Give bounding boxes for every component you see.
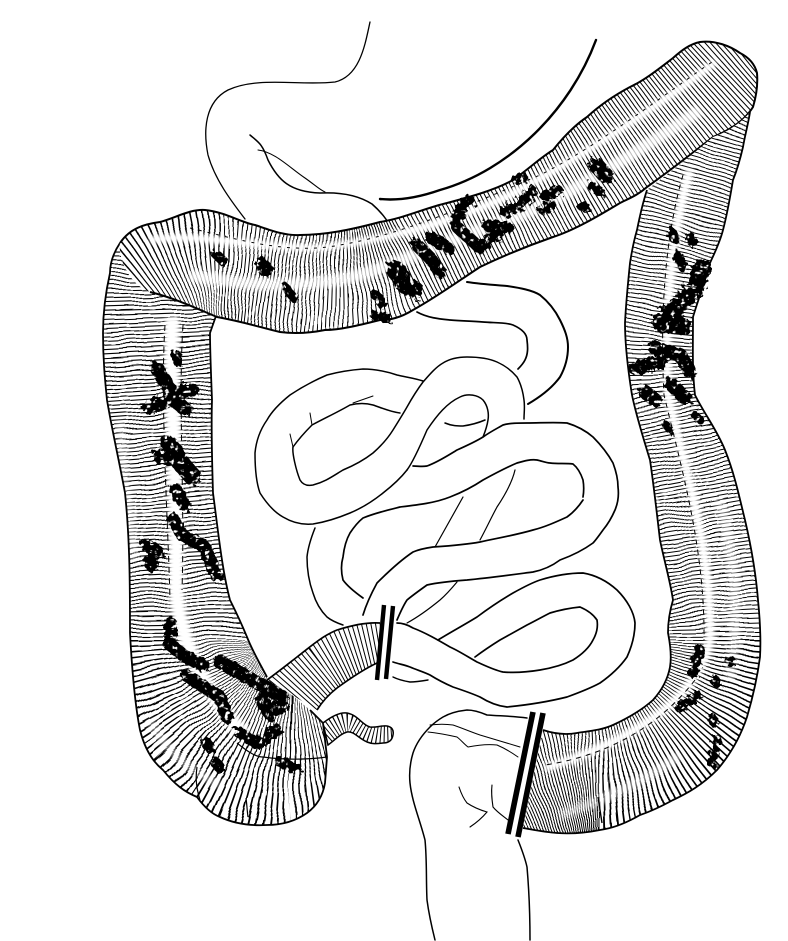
transverse colon: [119, 40, 758, 334]
rectum and sigmoid outline: [410, 710, 530, 940]
sigmoid fold: [598, 797, 602, 823]
ascending colon highlight band: [172, 318, 245, 735]
lesions: hepatic end and cecum: [170, 623, 296, 768]
cecum folds: [196, 743, 327, 817]
descending colon hatching: [490, 90, 725, 770]
lesions: ascending colon: [146, 355, 216, 575]
terminal ileum: [266, 622, 380, 710]
transverse colon outline: [120, 42, 757, 333]
lesions: black ulcer patches: [146, 166, 731, 768]
lesions: descending colon: [635, 233, 731, 763]
ascending colon and cecum: [102, 242, 328, 826]
clamp: small bowel double bar: [377, 605, 393, 680]
descending colon taenia line: [545, 175, 704, 765]
lesions: transverse colon: [216, 166, 606, 318]
clamp: sigmoid double bar: [508, 712, 543, 837]
descending colon: [522, 112, 762, 834]
transverse colon highlight band: [150, 62, 715, 248]
descending colon highlight band: [545, 170, 710, 768]
appendix: [323, 713, 395, 745]
stomach and duodenum outline: [206, 22, 596, 226]
ascending colon taenia line: [163, 325, 183, 600]
ascending colon hatching: [160, 250, 395, 750]
small intestine loops: [255, 282, 635, 707]
transverse colon taenia line: [190, 60, 715, 248]
ascending colon outline: [103, 243, 327, 825]
descending colon outline: [523, 112, 760, 833]
transverse colon hatching: [120, 42, 756, 332]
